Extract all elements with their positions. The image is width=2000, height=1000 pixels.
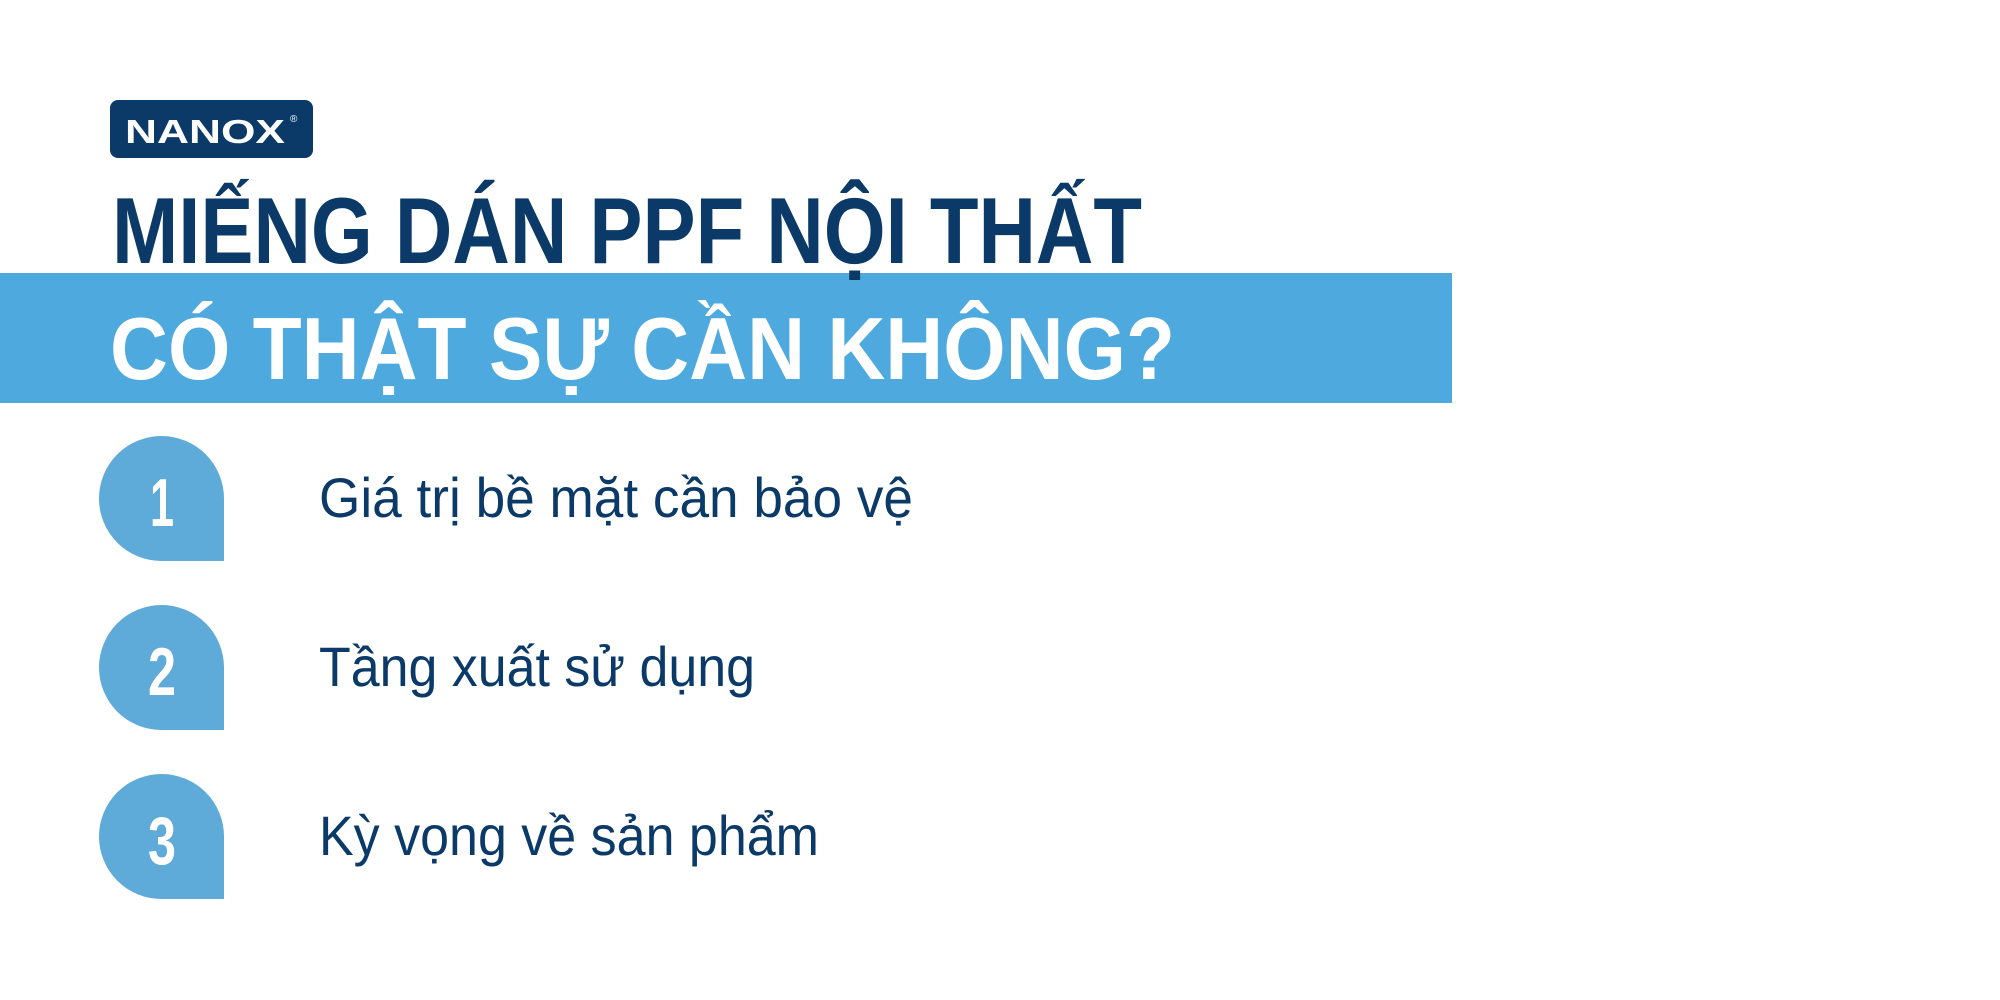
badge 3 (99, 774, 224, 899)
title (110, 177, 1175, 398)
blue band (0, 273, 1452, 403)
badge 1 (99, 436, 224, 561)
title: MIẾNG DÁN PPF NỘI THẤT (112, 177, 1142, 283)
title: CÓ THẬT SỰ CẦN KHÔNG? (110, 299, 1175, 398)
logo: NANOX: NANOX (125, 113, 285, 150)
logo: NANOX (110, 100, 313, 158)
text 2: Tầng xuất sử dụng (319, 635, 755, 698)
badge 2 (99, 605, 224, 730)
item 3 (99, 774, 819, 899)
text 1: Giá trị bề mặt cần bảo vệ (319, 466, 913, 529)
item 1 (99, 436, 913, 561)
item 2 (99, 605, 755, 730)
logo: NANOX: ® (290, 114, 298, 125)
badge 2: 2 (148, 634, 176, 710)
text 3: Kỳ vọng về sản phẩm (319, 804, 819, 867)
badge 3: 3 (148, 803, 176, 879)
badge 1: 1 (150, 465, 174, 541)
